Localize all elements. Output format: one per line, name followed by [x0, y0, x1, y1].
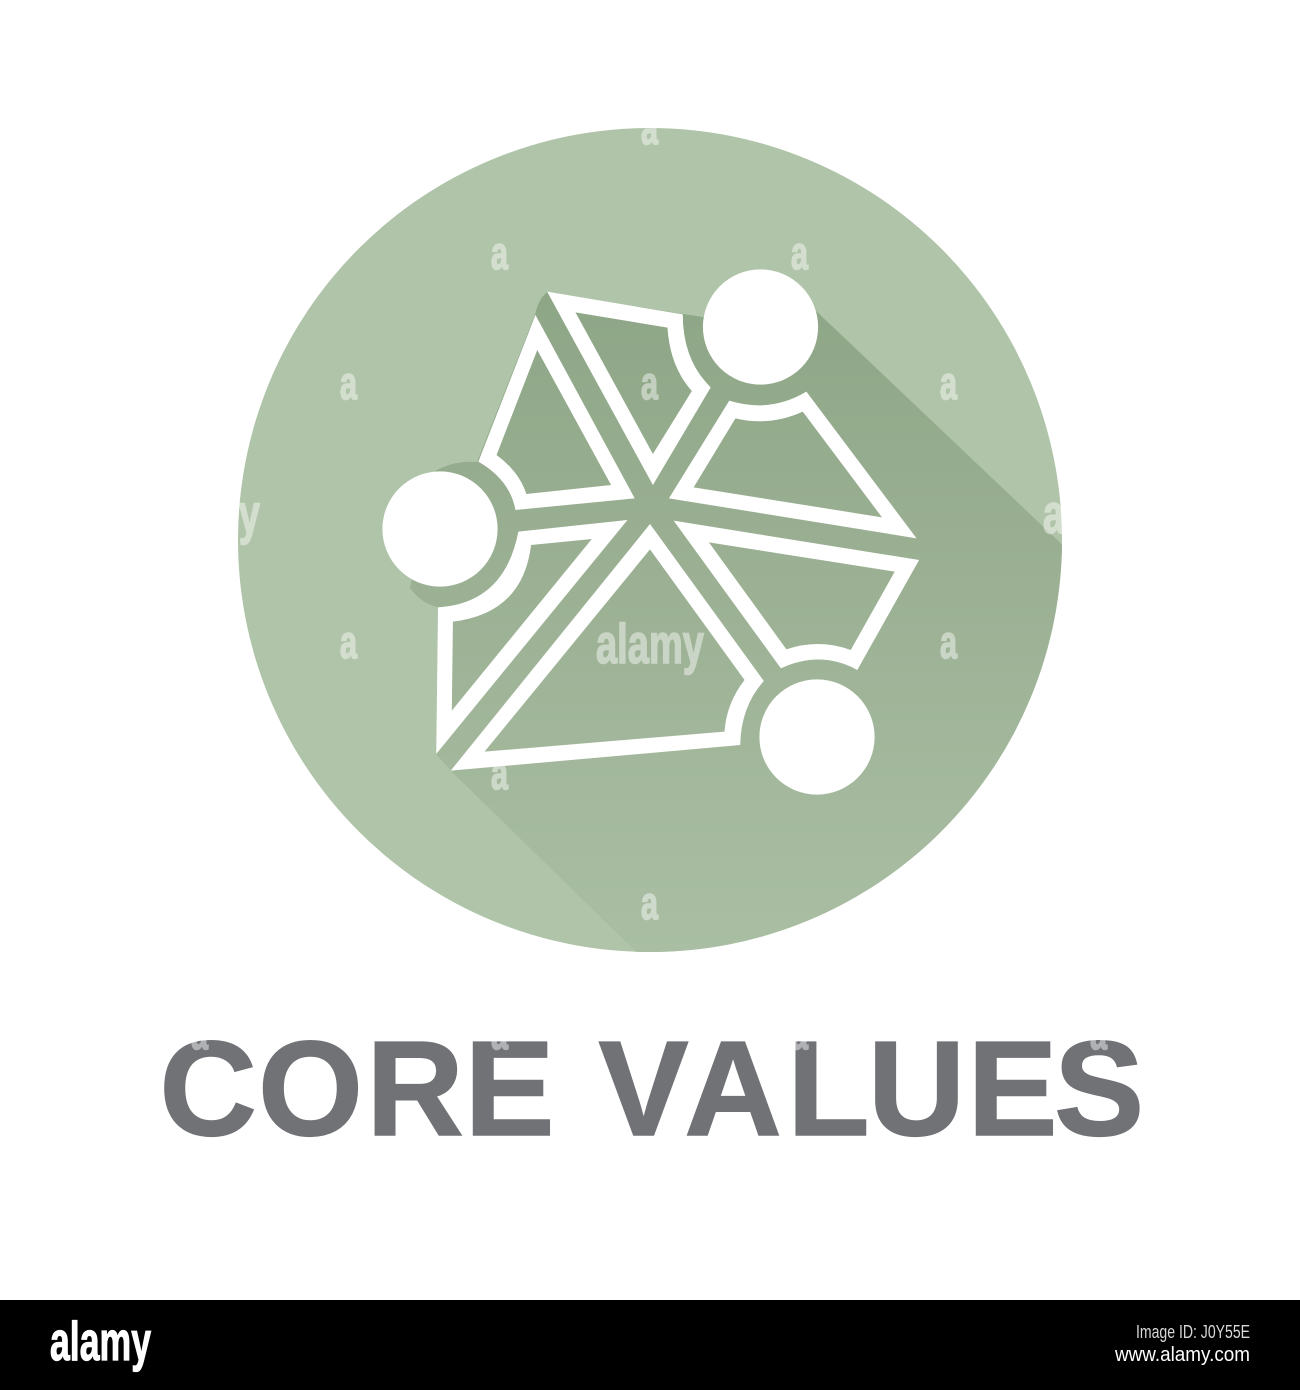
segment: lower right [674, 521, 919, 670]
watermark pattern: a [491, 747, 508, 799]
watermark pattern: a [940, 357, 957, 409]
icon: node bottom right [759, 679, 875, 795]
watermark pattern: a [791, 1007, 808, 1059]
watermark pattern: a [940, 616, 957, 668]
segment: bottom [451, 524, 764, 771]
segment: upper right [669, 392, 917, 538]
segment: upper left [478, 315, 635, 510]
watermark pattern: alamy [1043, 482, 1151, 545]
watermark pattern [152, 102, 1151, 1059]
website: www.alamy.com [1114, 1344, 1250, 1366]
segment: top [547, 292, 711, 485]
watermark pattern: a [641, 102, 658, 154]
title: CORE VALUES [159, 1013, 1144, 1164]
circle background [238, 128, 1062, 952]
watermark pattern: a [491, 227, 508, 279]
segment: lower left [436, 520, 627, 754]
footer logo: alamy [50, 1310, 151, 1372]
long drop shadow [410, 292, 1062, 952]
image id: Image ID: J0Y55E [1136, 1322, 1250, 1342]
watermark pattern: a [340, 616, 357, 668]
footer band [0, 1300, 1300, 1390]
icon: network of connected segments [436, 292, 919, 771]
icon: node left [382, 471, 498, 587]
watermark pattern: alamy [152, 482, 260, 545]
watermark pattern: a [641, 357, 658, 409]
watermark pattern: a [1090, 1007, 1107, 1059]
watermark pattern: alamy [596, 612, 704, 675]
watermark pattern: a [340, 357, 357, 409]
watermark pattern: a [191, 1007, 208, 1059]
badge: green circle with icon [238, 128, 1110, 980]
watermark pattern: a [491, 1007, 508, 1059]
watermark pattern: a [791, 227, 808, 279]
watermark pattern: a [641, 877, 658, 929]
icon: node top right [703, 269, 818, 385]
